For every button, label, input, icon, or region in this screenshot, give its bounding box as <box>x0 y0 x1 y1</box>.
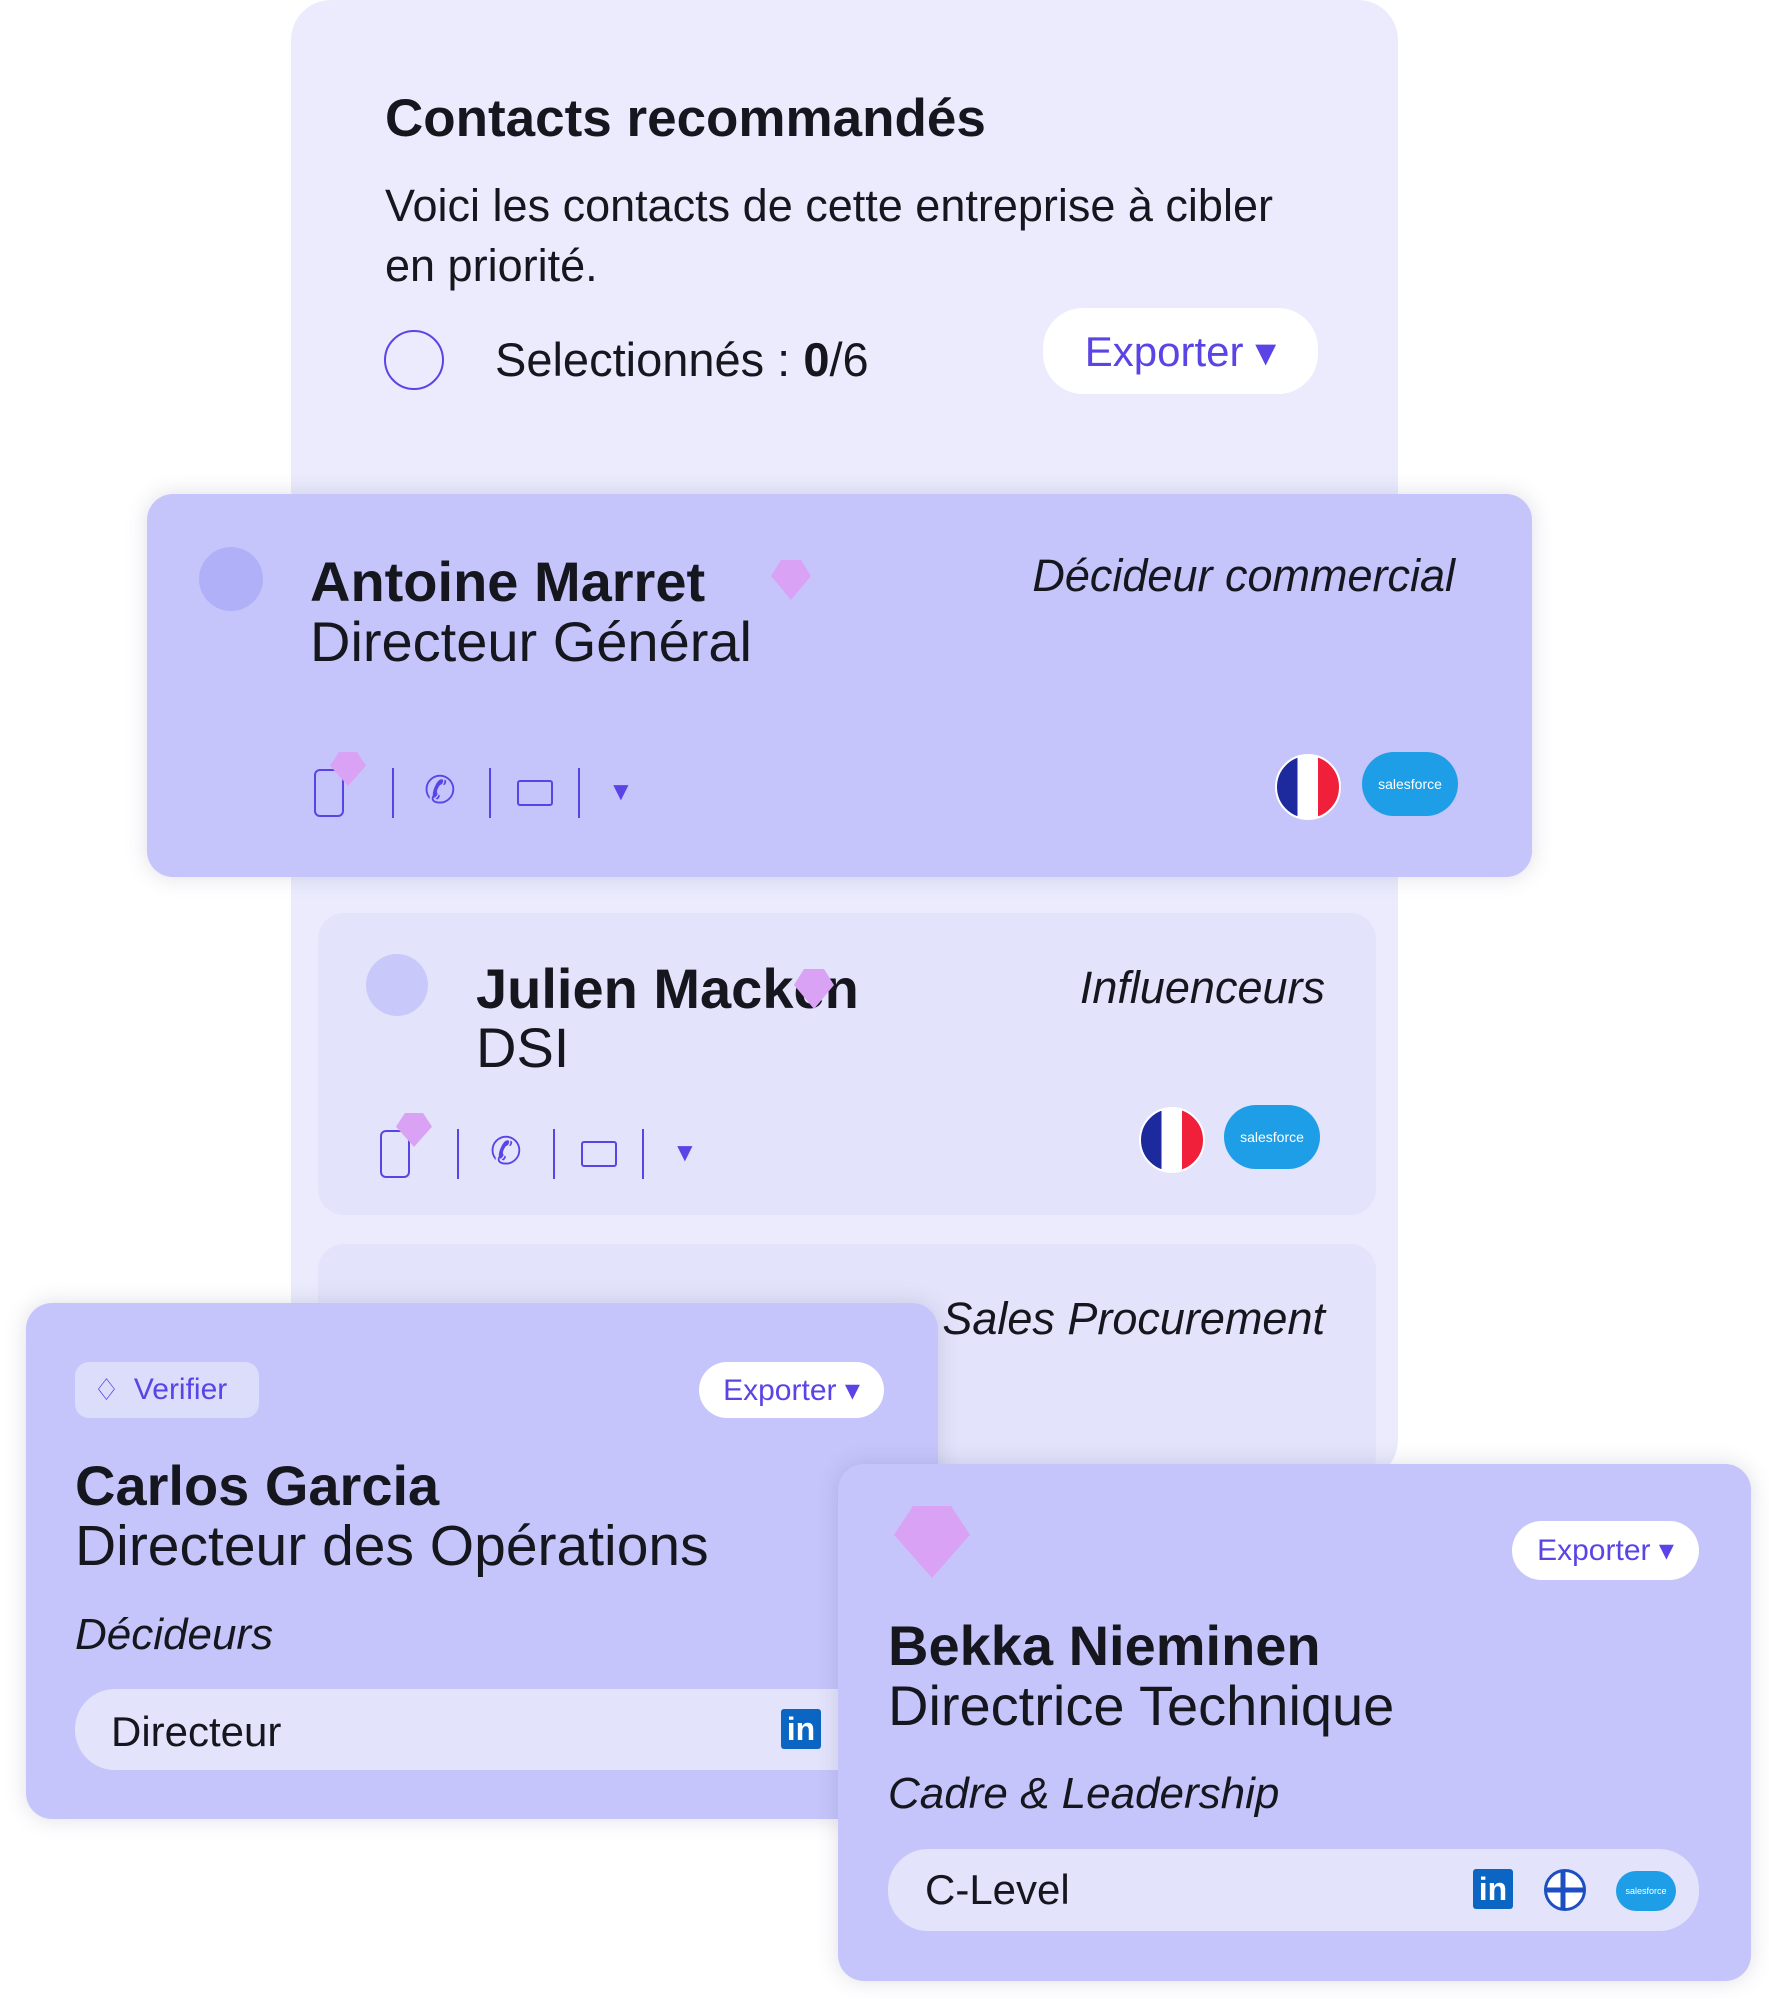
flag: France <box>1139 1107 1205 1173</box>
export pill: Exporter ▾ <box>723 1374 860 1406</box>
export pill: Exporter ▾ <box>1537 1534 1674 1567</box>
subtitle: en priorité. <box>385 240 598 291</box>
job title: Directeur Général <box>310 610 752 673</box>
export button <box>1043 308 1318 394</box>
select circle <box>384 330 444 390</box>
segment: Influenceurs <box>1080 962 1325 1013</box>
name: Julien Macken <box>476 957 859 1020</box>
export button: Exporter ▾ <box>1085 328 1276 374</box>
salesforce logo <box>1224 1105 1320 1169</box>
avatar <box>199 547 263 611</box>
card: Julien <box>366 954 1324 1179</box>
icon: linkedin <box>1473 1869 1513 1909</box>
level bar: C-Level <box>925 1866 1070 1913</box>
name: Bekka Nieminen <box>888 1614 1321 1677</box>
job title: Directeur des Opérations <box>75 1514 709 1578</box>
icons row: ▼ <box>608 776 634 806</box>
segment: Décideur commercial <box>1032 550 1455 601</box>
export pill <box>1512 1521 1699 1580</box>
job title: Directrice Technique <box>888 1674 1394 1737</box>
panel: back list <box>291 0 1398 1480</box>
icons row <box>314 752 634 818</box>
card: Antoine Marret <box>147 494 1532 877</box>
segment: Cadre & Leadership <box>888 1769 1279 1818</box>
avatar <box>366 954 428 1016</box>
icons row <box>380 1113 698 1179</box>
verify pill <box>75 1362 259 1418</box>
icons row: ✆ <box>424 770 456 812</box>
name: Carlos Garcia <box>75 1454 439 1517</box>
level bar <box>888 1849 1699 1931</box>
salesforce logo <box>1362 752 1458 816</box>
icons row: ✆ <box>490 1131 522 1173</box>
verify pill: Verifier <box>134 1373 227 1406</box>
level bar: Directeur <box>111 1708 281 1755</box>
icon: salesforce <box>1616 1871 1676 1911</box>
subtitle <box>385 180 1273 291</box>
title: Contacts recommandés <box>385 89 986 148</box>
card: Carlos Garcia <box>26 1303 938 1819</box>
card: third (background) <box>318 1244 1376 1484</box>
verify pill: ♢ <box>93 1374 120 1406</box>
subtitle: Voici les contacts de cette entreprise à cibler <box>385 180 1273 231</box>
icon: linkedin: in <box>1479 1871 1507 1907</box>
job title: DSI <box>476 1016 569 1079</box>
icons row: ▼ <box>672 1137 698 1167</box>
segment: Sales Procurement <box>942 1293 1325 1344</box>
gem <box>894 1506 970 1578</box>
level bar <box>75 1689 935 1770</box>
salesforce logo: salesforce <box>1240 1129 1304 1145</box>
flag: France <box>1275 754 1341 820</box>
salesforce logo: salesforce <box>1378 776 1442 792</box>
name: Antoine Marret <box>310 550 705 613</box>
card: Bekka Nieminen <box>838 1464 1751 1981</box>
segment: Décideurs <box>75 1610 273 1659</box>
gem <box>771 560 811 600</box>
export pill <box>699 1362 884 1418</box>
gem <box>794 969 834 1009</box>
icon: finland flag <box>1544 1869 1586 1911</box>
icon: salesforce: salesforce <box>1625 1886 1667 1896</box>
level bar: in <box>787 1711 815 1747</box>
selected count: Selectionnés : 0/6 <box>495 333 869 386</box>
